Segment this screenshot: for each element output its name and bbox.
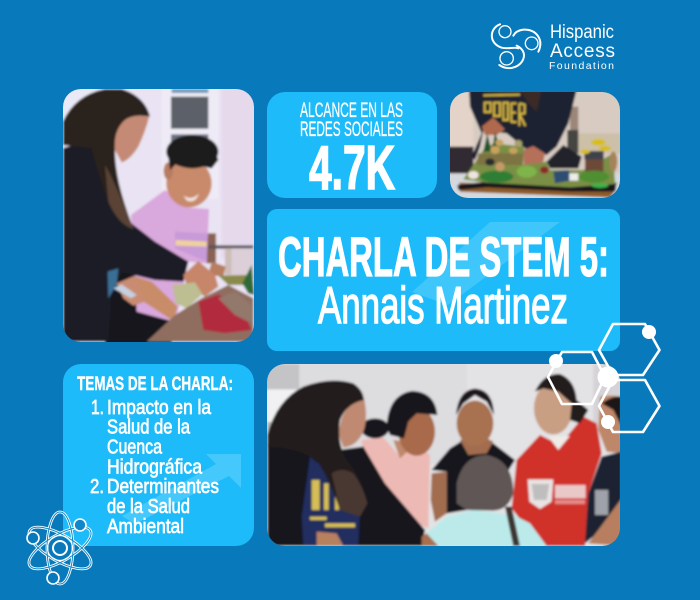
topic 2 line 3: Ambiental [107, 516, 184, 538]
icon: hexagon molecule cluster [548, 324, 660, 432]
topic 1 line 2: Salud de la [107, 416, 191, 438]
reach label line 1: ALCANCE EN LAS [300, 99, 403, 122]
panel: talk title [267, 209, 620, 351]
title line 2: speaker name: Annais Martinez [318, 277, 568, 335]
topic list [90, 397, 219, 538]
topic 2 line 1: Determinantes [107, 476, 219, 498]
photo: group of girls in discussion [263, 360, 623, 550]
watermark arrow [122, 454, 241, 524]
topic 1 line 3: Cuenca [107, 436, 163, 458]
girl 2: pink sweater [361, 436, 431, 528]
logo wordmark line 2: Access [550, 41, 615, 62]
model [459, 183, 617, 197]
logo wordmark line 3: Foundation [549, 60, 614, 72]
girl 3: black shirt [432, 440, 515, 513]
girl 5: right edge [598, 396, 622, 453]
boy [131, 190, 209, 322]
panel: social media reach [267, 92, 437, 203]
logo: Hispanic Access Foundation [492, 22, 615, 72]
topic 1 line 1: Impacto en la [107, 397, 212, 419]
photo: woman and boy with watershed model [63, 89, 254, 342]
number 2: 2. [90, 476, 104, 498]
panel: talk topics [63, 364, 254, 546]
logo wordmark line 1: Hispanic [550, 22, 614, 43]
icon: atom [23, 512, 97, 584]
topics heading: TEMAS DE LA CHARLA: [77, 373, 233, 395]
number 1: 1. [91, 397, 104, 419]
girl 6: back of head, light shirt [426, 510, 547, 546]
girl 1: woman at left [267, 443, 425, 546]
model terrain [147, 285, 253, 342]
icon: triple spiral logo mark [492, 24, 540, 68]
watermark arrow stripe [412, 222, 560, 305]
topic 2 line 2: de la Salud [107, 496, 190, 518]
girl 4: red hoodie [512, 417, 602, 546]
torso [469, 90, 577, 160]
dark lower area behind boy [105, 268, 172, 345]
topic 1 line 4: Hidrográfica [107, 456, 203, 478]
woman [63, 145, 188, 342]
reach label line 2: REDES SOCIALES [300, 118, 403, 141]
photo: hands on watershed model [450, 92, 620, 198]
reach number: 4.7K [309, 134, 395, 203]
